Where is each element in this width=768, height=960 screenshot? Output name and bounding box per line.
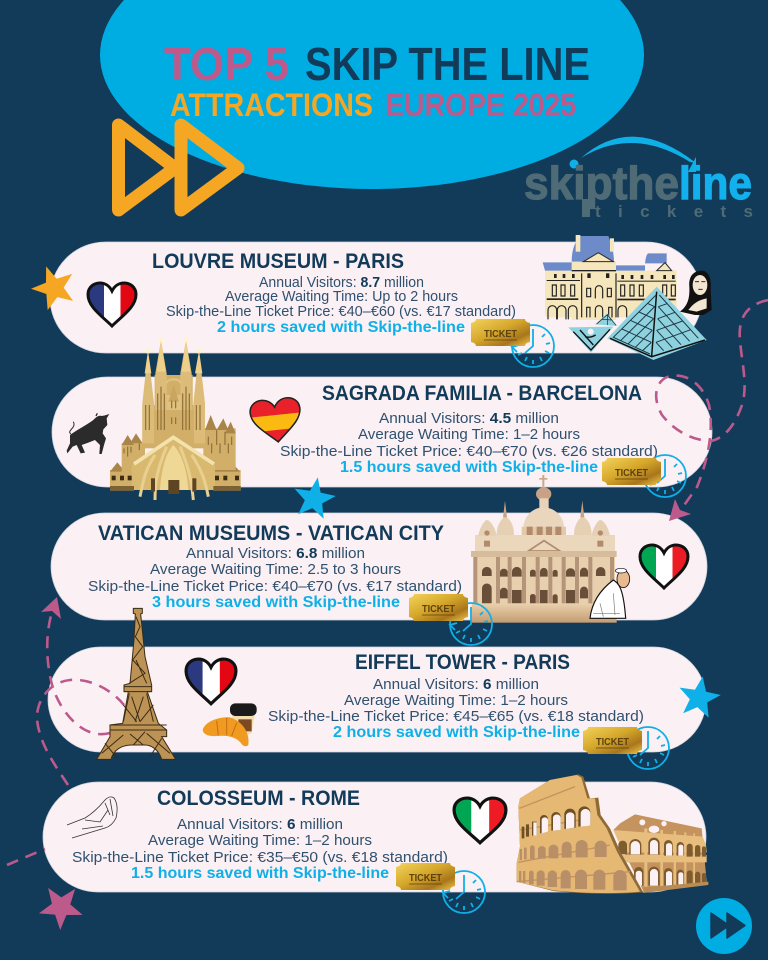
text block: Sagrada Familia: Skip-the-Line Ticket Price: €40–€70 (vs. €26 standard) <box>280 444 658 460</box>
icon: orange star <box>26 259 81 313</box>
text block: Louvre: Annual Visitors: 8.7 million <box>259 275 424 291</box>
icon: orange fast-forward <box>118 125 238 210</box>
icon: clock (Vatican) <box>450 603 492 645</box>
illustration: St Peter's Basilica with pope <box>471 475 630 623</box>
title: TOP 5 <box>164 38 289 90</box>
text block: Eiffel <box>268 651 644 741</box>
icon: ticket (Colosseum) <box>396 863 455 890</box>
icon: ticket (Louvre): TICKET <box>484 328 518 340</box>
icon: blue star right <box>675 673 723 719</box>
icon: bull <box>67 413 109 454</box>
text block: Sagrada Familia: Average Waiting Time: 1–2 hours <box>358 427 580 443</box>
illustration: coffee and croissant <box>203 703 257 746</box>
icon: clock (Eiffel) <box>627 727 669 769</box>
icon: ticket (Eiffel) <box>583 727 642 754</box>
text block: Louvre: 2 hours saved with Skip-the-line <box>217 319 465 336</box>
icon: pink star <box>32 875 92 935</box>
text block: Vatican <box>88 522 462 611</box>
text block: Louvre <box>152 250 516 336</box>
arrow: left dashed path <box>7 597 124 865</box>
title <box>164 38 590 123</box>
logo: skiptheline tickets: skipthe <box>524 157 679 209</box>
illustration: hand gesture sketch <box>67 797 117 838</box>
text block: Louvre: LOUVRE MUSEUM - PARIS <box>152 250 404 273</box>
text block: Colosseum: 1.5 hours saved with Skip-the-line <box>131 865 389 882</box>
icon: Italy heart (Vatican) <box>639 544 689 589</box>
panel: Colosseum pill <box>43 782 706 892</box>
text block: Colosseum <box>72 787 448 882</box>
icon: clock (Colosseum) <box>443 871 485 913</box>
icon: ticket (Sagrada): TICKET <box>615 467 649 479</box>
title: ATTRACTIONS <box>170 87 373 123</box>
panel: Vatican pill <box>51 513 707 620</box>
text block: Vatican: VATICAN MUSEUMS - VATICAN CITY <box>98 522 444 545</box>
text block: Colosseum: Skip-the-Line Ticket Price: €35–€50 (vs. €18 standard) <box>72 850 448 866</box>
text block: Vatican: Skip-the-Line Ticket Price: €40–€70 (vs. €17 standard) <box>88 579 462 595</box>
logo: skiptheline tickets: line <box>679 157 752 209</box>
illustration: Colosseum <box>517 774 708 894</box>
title: SKIP THE LINE <box>305 38 590 90</box>
text block: Vatican: Annual Visitors: 6.8 million <box>186 546 365 562</box>
icon: ticket (Colosseum): TICKET <box>409 872 443 884</box>
title: EUROPE 2025 <box>385 87 576 123</box>
text block: Louvre: Skip-the-Line Ticket Price: €40–€60 (vs. €17 standard) <box>166 304 516 320</box>
text block: Vatican: 3 hours saved with Skip-the-line <box>152 594 400 611</box>
arrow: right dashed path <box>656 300 768 521</box>
text block: Colosseum: Annual Visitors: 6 million <box>177 817 343 833</box>
icon: blue star top <box>290 474 338 520</box>
icon: ticket (Eiffel): TICKET <box>596 736 630 748</box>
panel: Eiffel pill <box>48 647 706 752</box>
icon: ticket (Vatican) <box>409 594 468 621</box>
icon: clock (Sagrada) <box>644 455 686 497</box>
text block: Sagrada Familia <box>280 382 658 476</box>
text block: Sagrada Familia: Annual Visitors: 4.5 million <box>379 411 559 427</box>
text block: Eiffel: Average Waiting Time: 1–2 hours <box>344 693 568 709</box>
icon: ticket (Sagrada) <box>602 458 661 485</box>
text block: Eiffel: EIFFEL TOWER - PARIS <box>355 651 570 674</box>
text block: Eiffel: Skip-the-Line Ticket Price: €45–€65 (vs. €18 standard) <box>268 709 644 725</box>
illustration: Louvre palace, pyramid and Mona Lisa <box>543 235 712 360</box>
logo: skiptheline tickets: tickets <box>595 202 753 221</box>
illustration: Sagrada Familia <box>110 338 241 500</box>
text block: Colosseum: COLOSSEUM - ROME <box>157 787 360 810</box>
text block: Eiffel: 2 hours saved with Skip-the-line <box>333 724 580 741</box>
text block: Louvre: Average Waiting Time: Up to 2 hours <box>225 289 458 305</box>
icon: clock (Louvre) <box>512 325 554 367</box>
icon: blue fast-forward button <box>696 898 752 954</box>
text block: Sagrada Familia: 1.5 hours saved with Skip-the-line <box>340 459 598 476</box>
text block: Sagrada Familia: SAGRADA FAMILIA - BARCELONA <box>322 382 642 405</box>
text block: Vatican: Average Waiting Time: 2.5 to 3 hours <box>150 562 401 578</box>
logo: skiptheline tickets <box>524 137 753 221</box>
panel: Sagrada Familia pill <box>52 377 712 487</box>
icon: ticket (Vatican): TICKET <box>422 603 456 615</box>
header ellipse <box>100 0 644 189</box>
text block: Eiffel: Annual Visitors: 6 million <box>373 677 539 693</box>
icon: France heart (Louvre) <box>87 282 137 327</box>
icon: Spain heart <box>249 397 301 443</box>
icon: France heart (Eiffel) <box>185 658 237 705</box>
icon: Italy heart (Colosseum) <box>453 797 507 844</box>
icon: ticket (Louvre) <box>471 319 530 346</box>
text block: Colosseum: Average Waiting Time: 1–2 hours <box>148 833 372 849</box>
panel: Louvre pill <box>50 242 702 353</box>
illustration: Eiffel Tower <box>97 608 176 759</box>
